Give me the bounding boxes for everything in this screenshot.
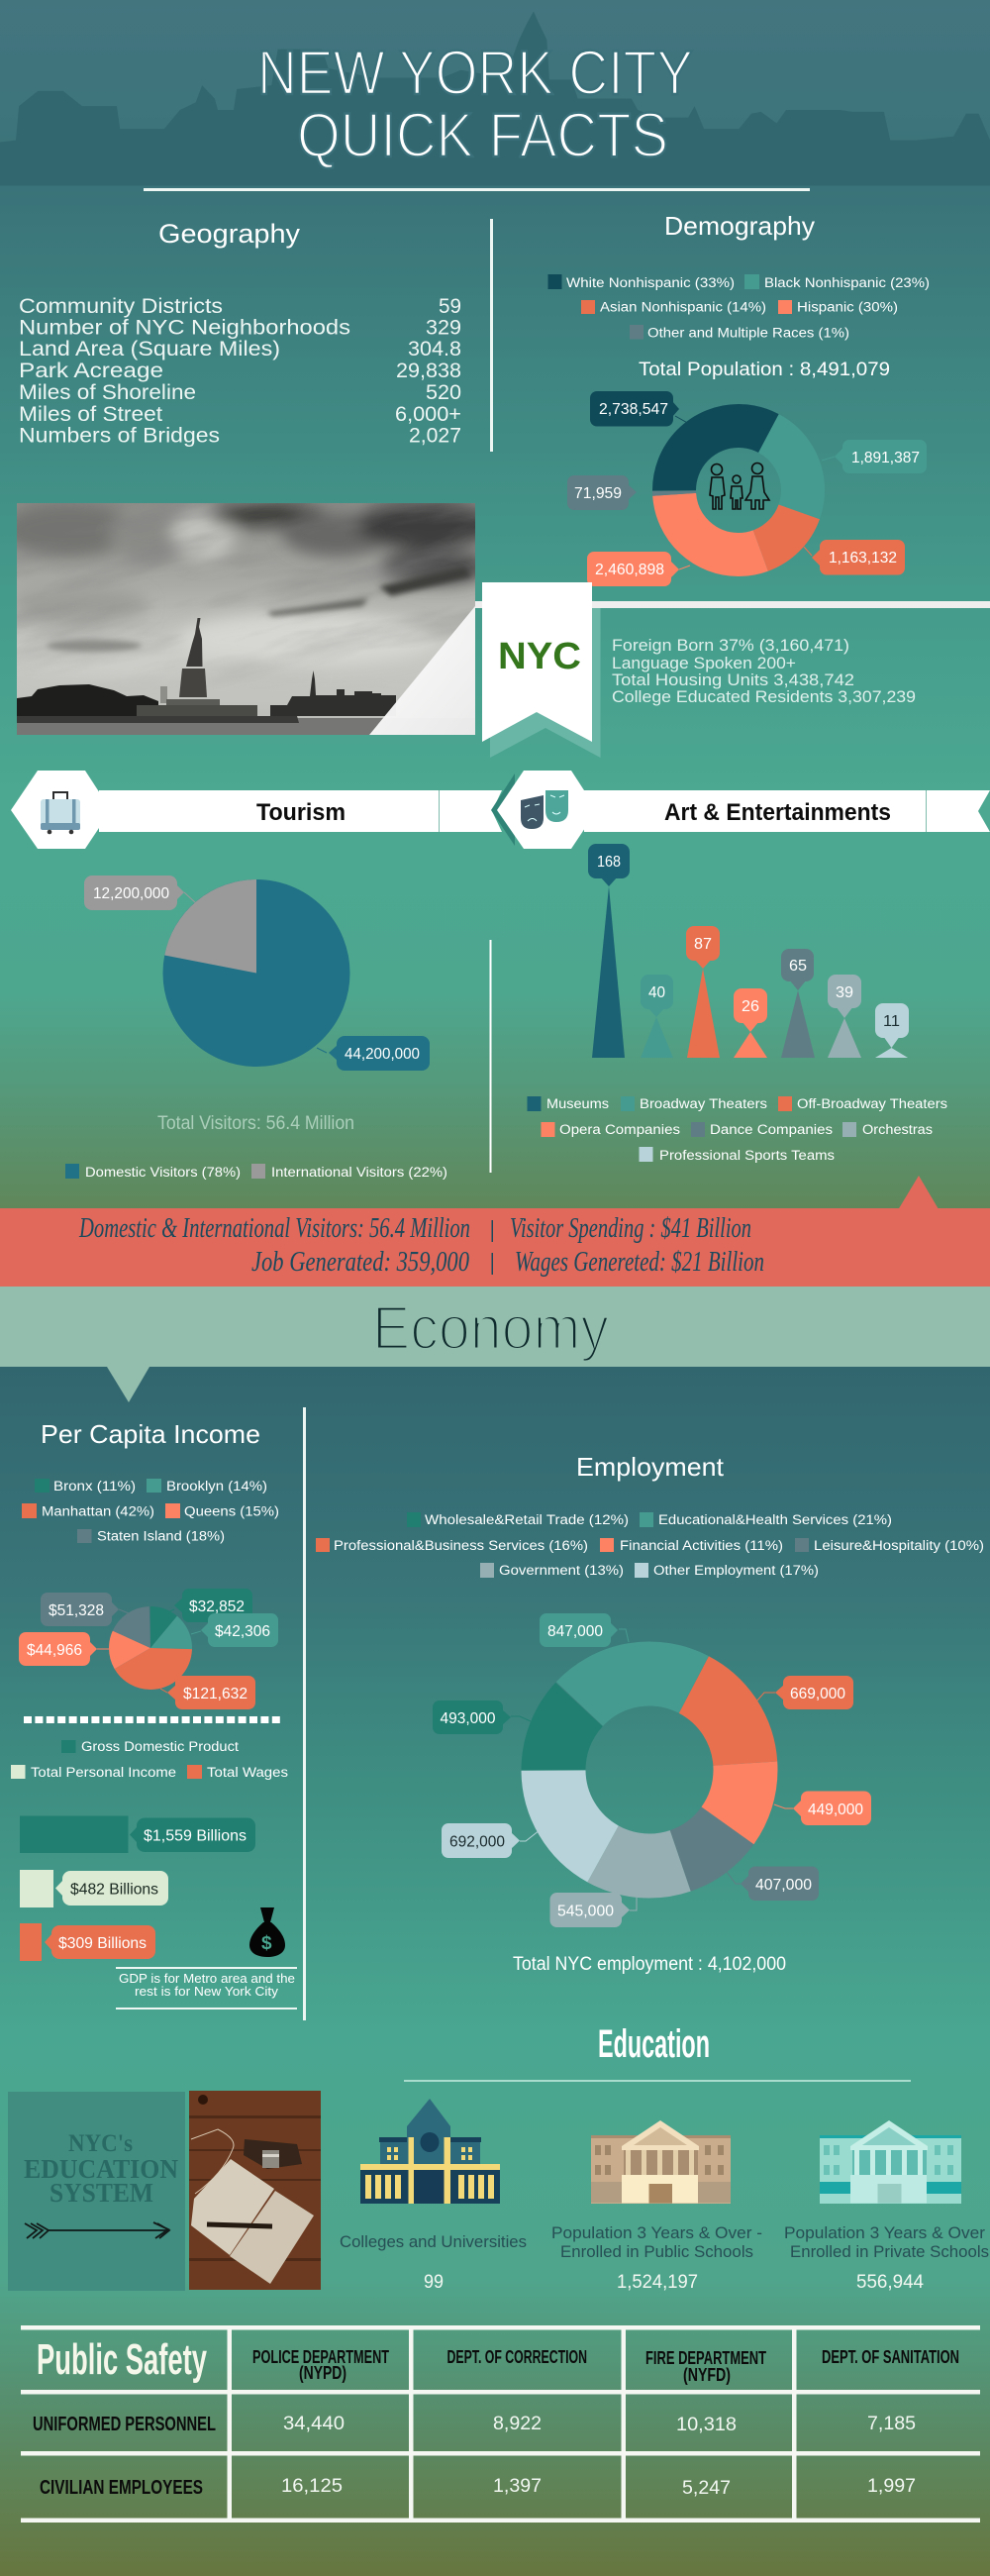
table row: uniformed personnel xyxy=(33,2414,916,2435)
heading: tourism: Tourism xyxy=(256,799,346,826)
table row: uniformed personnel: 10,318 xyxy=(676,2415,737,2435)
hexagon shadow xyxy=(491,773,515,846)
stat: private schools xyxy=(784,2223,989,2293)
callout: international visitors: 12,200,000 xyxy=(93,885,169,902)
red band: tourism summary xyxy=(0,1208,990,1287)
stat: colleges and universities: Colleges and Universities xyxy=(340,2232,527,2251)
divider xyxy=(489,940,491,1173)
employment legend xyxy=(316,1512,984,1578)
stat: private schools: Population 3 Years & Over xyxy=(784,2223,985,2242)
panel: per capita income xyxy=(11,1419,297,2009)
panel: art pin chart xyxy=(527,844,947,1163)
water xyxy=(17,718,383,735)
callout: other employment xyxy=(442,1823,540,1858)
income legend xyxy=(11,1739,288,1780)
art legend: Broadway Theaters xyxy=(640,1096,767,1111)
table row: uniformed personnel: 8,922 xyxy=(493,2414,542,2434)
panel: geography xyxy=(19,219,461,448)
NYC facts list: Total Housing Units 3,438,742 xyxy=(612,670,854,689)
education rule xyxy=(404,2080,911,2082)
bar: gross domestic product xyxy=(20,1816,255,1853)
NYC logo text: NYC xyxy=(498,636,581,677)
callout: professional and business: 669,000 xyxy=(790,1686,845,1702)
tourism legend: International Visitors (22%) xyxy=(271,1165,447,1180)
stat: public schools xyxy=(551,2223,762,2293)
education system card xyxy=(8,2092,185,2291)
callout: financial activities xyxy=(774,1791,871,1825)
geography fact list: 329 xyxy=(426,317,461,339)
art legend: Orchestras xyxy=(862,1122,933,1137)
donut chart: population xyxy=(674,426,803,555)
icon: private school building xyxy=(820,2120,961,2204)
bar: orchestras xyxy=(828,975,861,1058)
borough legend: Bronx (11%) xyxy=(53,1479,136,1494)
geography fact list xyxy=(19,295,461,448)
borough legend: Staten Island (18%) xyxy=(97,1529,225,1543)
tourism legend xyxy=(65,1164,447,1180)
geography fact list: Community Districts xyxy=(19,295,223,318)
geography fact list: 59 xyxy=(439,295,461,318)
panel: employment xyxy=(316,1452,984,1975)
bar: museums: 168 xyxy=(597,854,621,871)
employment legend: Government (13%) xyxy=(499,1563,624,1578)
icon: college building xyxy=(360,2099,500,2204)
skyline silhouette xyxy=(0,11,990,186)
NYC facts list: Foreign Born 37% (3,160,471) xyxy=(612,636,849,655)
income legend: Gross Domestic Product xyxy=(81,1739,239,1754)
demography legend: Asian Nonhispanic (14%) xyxy=(600,300,766,315)
geography fact list: 29,838 xyxy=(396,360,461,382)
borough legend: Queens (15%) xyxy=(184,1504,279,1519)
pie chart: boroughs xyxy=(130,1627,171,1669)
table header row: DEPT. OF CORRECTION xyxy=(447,2347,587,2367)
geography fact list: 520 xyxy=(426,381,461,404)
callout: government: 545,000 xyxy=(557,1904,614,1919)
income legend: Total Wages xyxy=(207,1765,288,1780)
photo: notebook on desk xyxy=(189,2091,321,2290)
education system card: SYSTEM xyxy=(50,2178,153,2208)
geography fact list: Numbers of Bridges xyxy=(19,425,220,448)
icon: theatre masks xyxy=(521,790,568,829)
NYC facts list: College Educated Residents 3,307,239 xyxy=(612,687,916,706)
trees xyxy=(17,684,158,716)
heading: per capita income: Per Capita Income xyxy=(41,1419,260,1449)
far skyline xyxy=(270,670,396,716)
callout: black nonhispanic xyxy=(822,440,927,473)
total visitors: Total Visitors: 56.4 Million xyxy=(157,1113,354,1134)
callout: manhattan xyxy=(160,1676,255,1709)
title: NEW YORK CITY xyxy=(257,39,693,108)
bar: professional sports teams: 11 xyxy=(883,1013,900,1030)
red band: tourism summary: Job Generated: 359,000 xyxy=(251,1247,469,1278)
geography fact list: Land Area (Square Miles) xyxy=(19,338,280,361)
employment legend: Other Employment (17%) xyxy=(653,1563,819,1578)
heading: employment: Employment xyxy=(576,1452,725,1482)
education system card: NYC's xyxy=(68,2130,133,2157)
tourism legend: Domestic Visitors (78%) xyxy=(85,1165,241,1180)
callout: other employment: 692,000 xyxy=(449,1834,505,1850)
bar: broadway theaters xyxy=(641,975,673,1058)
table: public safety xyxy=(21,2325,980,2523)
education system card: EDUCATION xyxy=(24,2154,178,2184)
callout: domestic visitors: 44,200,000 xyxy=(345,1046,420,1063)
callout: education and health xyxy=(540,1613,629,1647)
total population: Total Population : 8,491,079 xyxy=(639,360,890,380)
employment legend: Financial Activities (11%) xyxy=(620,1538,783,1553)
arrow xyxy=(25,2222,169,2238)
callout: hispanic xyxy=(587,552,690,586)
bar: opera companies xyxy=(734,988,767,1058)
bar: off-broadway theaters: 87 xyxy=(694,936,712,953)
red band: tourism summary: Domestic & International Visitors: 56.4 Million xyxy=(78,1213,470,1244)
table header row xyxy=(252,2347,959,2385)
donut chart: employment xyxy=(514,1634,785,1906)
employment legend: Professional&Business Services (16%) xyxy=(334,1538,588,1553)
GDP note: GDP is for Metro area and the xyxy=(119,1972,295,1986)
table header row: (NYFD) xyxy=(683,2365,731,2385)
hexagon: art xyxy=(497,771,597,849)
table header row: (NYPD) xyxy=(299,2363,346,2383)
callout: leisure and hospitality: 407,000 xyxy=(755,1877,812,1894)
liberty island xyxy=(17,716,299,723)
demography legend: Hispanic (30%) xyxy=(797,300,898,315)
table row: civilian employees xyxy=(40,2476,916,2499)
panel: education xyxy=(8,2022,989,2293)
stat: colleges and universities xyxy=(340,2232,527,2293)
panel: demography xyxy=(548,211,930,586)
title rule xyxy=(144,188,810,191)
photo: statue of liberty xyxy=(17,503,475,735)
heading: education: Education xyxy=(598,2022,710,2066)
table row: civilian employees: 5,247 xyxy=(682,2478,731,2499)
red band: tourism summary: Wages Genereted: $21 Billion xyxy=(515,1247,764,1278)
bar: off-broadway theaters xyxy=(686,926,720,1058)
GDP note xyxy=(116,1967,297,2009)
icon: family xyxy=(710,464,769,509)
red band pointer xyxy=(899,1176,939,1209)
background: upper section xyxy=(0,0,990,1208)
horizontal white bar xyxy=(475,601,990,608)
bar: total wages: $309 Billions xyxy=(58,1935,147,1952)
ribbon shadow xyxy=(490,608,600,758)
GDP note: rest is for New York City xyxy=(135,1985,279,1999)
banner: tourism xyxy=(11,771,502,849)
income legend: Total Personal Income xyxy=(31,1765,176,1780)
heading: geography: Geography xyxy=(158,219,301,249)
heading: public safety: Public Safety xyxy=(37,2335,207,2384)
table row: civilian employees: 1,997 xyxy=(867,2476,916,2497)
table row: civilian employees: 16,125 xyxy=(281,2476,343,2497)
NYC facts list xyxy=(612,636,916,706)
geography fact list: 6,000+ xyxy=(395,403,461,426)
pie chart: visitors xyxy=(210,926,303,1020)
callout: domestic visitors xyxy=(317,1036,430,1071)
callout: financial activities: 449,000 xyxy=(808,1802,863,1818)
borough legend: Brooklyn (14%) xyxy=(166,1479,267,1494)
art legend xyxy=(527,1096,947,1163)
table header row: POLICE DEPARTMENT xyxy=(252,2347,389,2367)
stat: public schools: 1,524,197 xyxy=(617,2272,698,2293)
icon: money bag: $ xyxy=(261,1933,272,1954)
employment legend: Leisure&Hospitality (10%) xyxy=(814,1538,984,1553)
callout: queens: $44,966 xyxy=(27,1642,82,1659)
art legend: Opera Companies xyxy=(559,1122,680,1137)
callout: other races: 71,959 xyxy=(574,485,622,502)
employment legend: Educational&Health Services (21%) xyxy=(658,1512,892,1527)
bar: dance companies: 65 xyxy=(789,958,807,975)
callout: education and health: 847,000 xyxy=(547,1623,603,1640)
bar: total personal income xyxy=(20,1870,168,1907)
callout: wholesale and retail: 493,000 xyxy=(440,1710,496,1727)
borough legend: Manhattan (42%) xyxy=(42,1504,154,1519)
red band: tourism summary: Visitor Spending : $41 Billion xyxy=(510,1213,751,1244)
art legend: Museums xyxy=(546,1096,609,1111)
callout: white nonhispanic xyxy=(590,391,691,426)
callout: other races xyxy=(567,475,637,510)
bar: total wages xyxy=(20,1923,155,1961)
table row: uniformed personnel: 7,185 xyxy=(867,2414,916,2434)
borough legend xyxy=(22,1479,279,1543)
callout: black nonhispanic: 1,891,387 xyxy=(851,450,920,466)
table row: civilian employees: CIVILIAN EMPLOYEES xyxy=(40,2477,203,2499)
economy band xyxy=(0,1287,990,1402)
panel: tourism chart xyxy=(65,876,447,1180)
geography fact list: 304.8 xyxy=(408,338,461,361)
divider xyxy=(303,1407,306,2020)
art legend: Off-Broadway Theaters xyxy=(797,1096,947,1111)
callout: white nonhispanic: 2,738,547 xyxy=(599,401,668,418)
stat: public schools: Enrolled in Public Schools xyxy=(560,2242,753,2261)
geography fact list: Miles of Street xyxy=(19,403,162,426)
callout: hispanic: 2,460,898 xyxy=(595,562,664,578)
table row: uniformed personnel: 34,440 xyxy=(283,2414,345,2434)
demography legend: Other and Multiple Races (1%) xyxy=(647,326,849,341)
callout: bronx: $32,852 xyxy=(189,1598,245,1615)
callout: staten island: $51,328 xyxy=(49,1602,104,1619)
callout: bronx xyxy=(168,1589,252,1622)
bar: professional sports teams xyxy=(875,1003,909,1058)
callout: international visitors xyxy=(84,876,196,910)
art legend: Dance Companies xyxy=(710,1122,833,1137)
stat: private schools: Enrolled in Private Schools xyxy=(790,2242,989,2261)
dashed divider xyxy=(24,1716,283,1723)
callout: manhattan: $121,632 xyxy=(183,1686,248,1702)
divider xyxy=(490,219,493,452)
bar: gross domestic product: $1,559 Billions xyxy=(144,1828,247,1844)
banner: art and entertainments xyxy=(491,771,990,849)
geography fact list: Number of NYC Neighborhoods xyxy=(19,317,350,339)
callout: asian nonhispanic xyxy=(804,540,905,574)
icon: public school building xyxy=(591,2120,731,2204)
hexagon: tourism xyxy=(11,771,111,849)
geography fact list: Miles of Shoreline xyxy=(19,381,196,404)
table header row: FIRE DEPARTMENT xyxy=(645,2348,766,2368)
bar: orchestras: 39 xyxy=(836,984,853,1001)
bar: broadway theaters: 40 xyxy=(648,984,665,1001)
table row: uniformed personnel: UNIFORMED PERSONNEL xyxy=(33,2414,216,2435)
icon: money bag xyxy=(249,1907,285,1957)
NYC facts list: Language Spoken 200+ xyxy=(612,654,796,672)
callout: leisure and hospitality xyxy=(727,1866,819,1901)
heading: art and entertainments: Art & Entertainments xyxy=(664,799,891,826)
icon: suitcase xyxy=(41,792,80,834)
geography fact list: Park Acreage xyxy=(19,360,163,382)
stat: colleges and universities: 99 xyxy=(424,2272,444,2293)
heading: demography: Demography xyxy=(664,211,815,241)
callout: asian nonhispanic: 1,163,132 xyxy=(829,550,897,567)
demography legend xyxy=(548,274,930,341)
title xyxy=(257,39,693,170)
callout: brooklyn: $42,306 xyxy=(215,1623,270,1640)
background: lower section xyxy=(0,1367,990,2576)
bar: total personal income: $482 Billions xyxy=(70,1882,158,1898)
demography legend: Black Nonhispanic (23%) xyxy=(764,275,930,290)
geography fact list: 2,027 xyxy=(409,425,461,448)
stat: private schools: 556,944 xyxy=(856,2272,924,2293)
stat: public schools: Population 3 Years & Over - xyxy=(551,2223,762,2242)
callout: government xyxy=(550,1893,637,1927)
callout: staten island xyxy=(41,1593,129,1626)
ribbon: NYC xyxy=(482,582,592,742)
bar: opera companies: 26 xyxy=(742,998,759,1015)
total employment: Total NYC employment : 4,102,000 xyxy=(513,1954,786,1975)
employment legend: Wholesale&Retail Trade (12%) xyxy=(425,1512,629,1527)
callout: brooklyn xyxy=(191,1613,278,1647)
heading: economy: Economy xyxy=(372,1294,609,1363)
bar: dance companies xyxy=(781,949,815,1058)
table row: civilian employees: 1,397 xyxy=(493,2476,542,2497)
art legend: Professional Sports Teams xyxy=(659,1148,835,1163)
title: QUICK FACTS xyxy=(297,101,668,170)
statue xyxy=(186,618,202,667)
callout: wholesale and retail xyxy=(433,1700,531,1734)
bar: museums xyxy=(588,844,630,1058)
demography legend: White Nonhispanic (33%) xyxy=(566,275,735,290)
photo fade triangle xyxy=(369,606,475,735)
callout: queens xyxy=(19,1632,109,1666)
callout: professional and business xyxy=(756,1676,853,1709)
